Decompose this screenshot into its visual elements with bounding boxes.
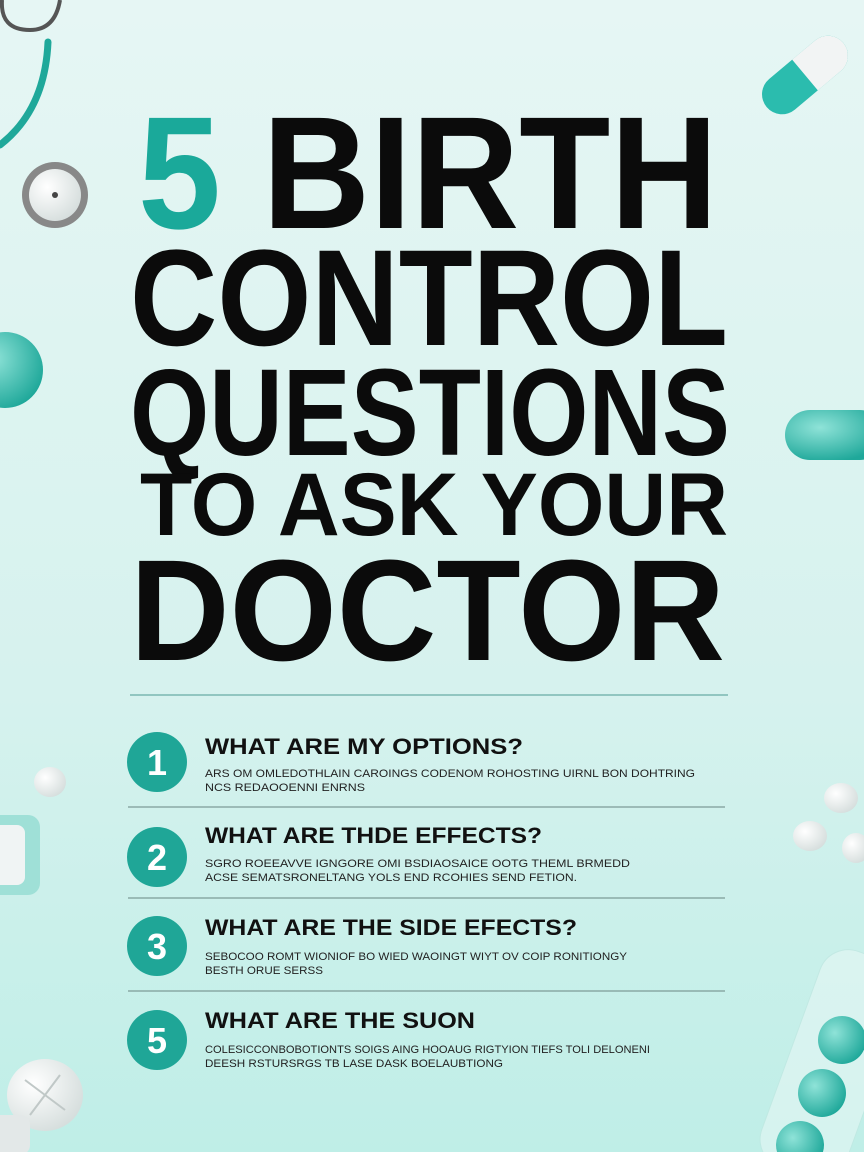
item 3: BESTH ORUE SERSS (205, 965, 323, 977)
icon: blister left (0, 815, 40, 895)
item 1: ARS OM OMLEDOTHLAIN CAROINGS CODENOM ROHOSTING UIRNL BON DOHTRING (205, 768, 695, 780)
title: QUESTIONS (130, 345, 730, 482)
icon: stethoscope (0, 0, 88, 228)
item 5: WHAT ARE THE SUON (205, 1008, 475, 1033)
icon: capsule right (785, 410, 864, 460)
icon: capsule top right (754, 28, 856, 122)
item 3: SEBOCOO ROMT WIONIOF BO WIED WAOINGT WIYT OV COIP RONITIONGY (205, 951, 628, 963)
item 5 (127, 1008, 650, 1070)
icon: teal ball left (0, 332, 43, 408)
title: 5 BIRTH (138, 83, 718, 262)
icon: test tube with balls (752, 941, 864, 1152)
title: TO ASK YOUR (140, 454, 728, 554)
item 1: WHAT ARE MY OPTIONS? (205, 734, 523, 759)
item 3: WHAT ARE THE SIDE EFECTS? (205, 915, 577, 940)
item 3 (127, 915, 628, 977)
icon: big pill bottom left (0, 1059, 83, 1152)
item 1: 1 (147, 742, 167, 783)
title (130, 83, 730, 691)
item 2: 2 (147, 837, 167, 878)
item 1: NCS REDAOOENNI ENRNS (205, 782, 365, 794)
title: CONTROL (130, 222, 728, 375)
item 2 (127, 823, 630, 887)
item 2: ACSE SEMATSRONELTANG YOLS END RCOHIES SEND FETION. (205, 872, 577, 884)
item 2: SGRO ROEEAVVE IGNGORE OMI BSDIAOSAICE OOTG THEML BRMEDD (205, 858, 630, 870)
item 5: 5 (147, 1020, 167, 1061)
item 2: WHAT ARE THDE EFFECTS? (205, 823, 542, 848)
icon: white pills right (34, 767, 864, 863)
item 3: 3 (147, 926, 167, 967)
item 1 (127, 732, 695, 794)
item 5: COLESICCONBOBOTIONTS SOIGS AING HOOAUG RIGTYION TIEFS TOLI DELONENI (205, 1044, 650, 1056)
title: DOCTOR (130, 530, 725, 691)
item 5: DEESH RSTURSRGS TB LASE DASK BOELAUBTIONG (205, 1058, 503, 1070)
